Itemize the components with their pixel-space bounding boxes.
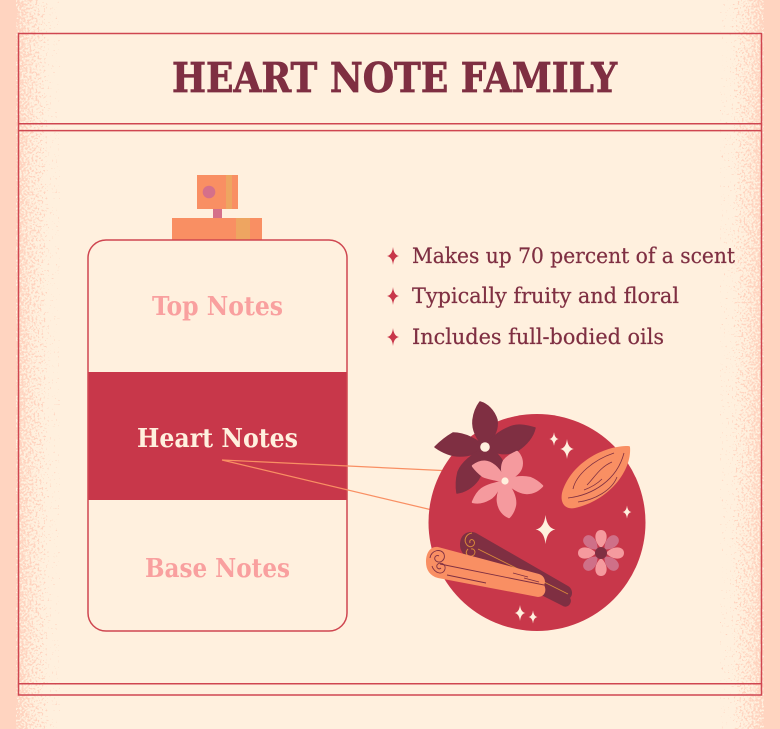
icon: sparkles bbox=[515, 432, 631, 624]
icon: dark flower bbox=[435, 402, 535, 493]
heart notes illustration circle bbox=[426, 402, 646, 631]
callout lines from heart notes to circle bbox=[222, 460, 442, 510]
label: base notes: Base Notes bbox=[145, 554, 290, 584]
icon: pink flower bbox=[473, 452, 542, 517]
perfume bottle diagram bbox=[88, 175, 347, 631]
bottle outline bbox=[88, 240, 347, 631]
bullet: makes up 70 percent: Makes up 70 percent of a scent bbox=[412, 244, 735, 269]
bottle cap and sprayer bbox=[172, 175, 262, 240]
title: HEART NOTE FAMILY bbox=[172, 54, 618, 102]
bullet: fruity and floral: Typically fruity and floral bbox=[412, 284, 679, 309]
icon: almond bbox=[562, 446, 630, 508]
icon: cinnamon sticks bbox=[426, 532, 572, 607]
heart notes band bbox=[88, 372, 347, 500]
label: heart notes: Heart Notes bbox=[137, 424, 298, 454]
bullet: full-bodied oils: Includes full-bodied oils bbox=[412, 325, 664, 350]
icon: small round flower bbox=[578, 530, 624, 576]
label: top notes: Top Notes bbox=[152, 292, 283, 322]
bullet list bbox=[387, 244, 735, 350]
